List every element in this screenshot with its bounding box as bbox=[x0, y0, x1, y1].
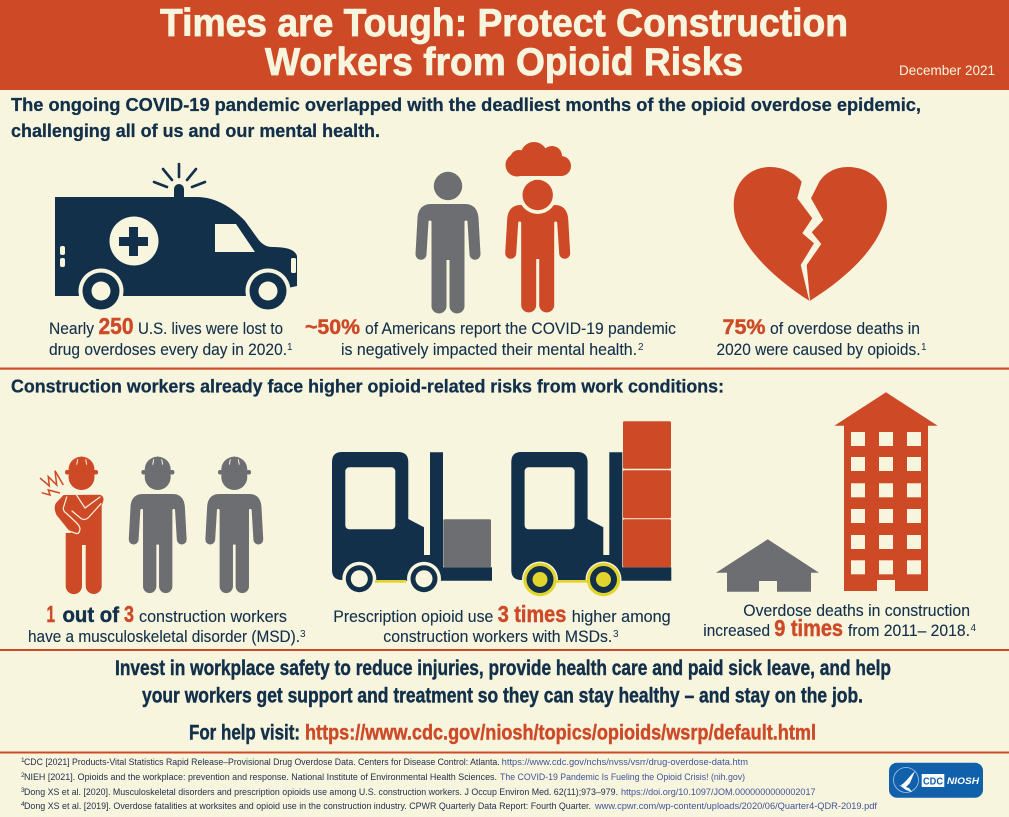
caption: overdose lives: 1 bbox=[287, 342, 293, 353]
icon: broken heart bbox=[734, 167, 887, 301]
caption: opioid share: 1 bbox=[921, 342, 927, 353]
caption: opioid share: 2020 were caused by opioids. bbox=[716, 341, 920, 359]
references: 1 bbox=[21, 757, 25, 764]
references: 4 bbox=[21, 801, 25, 808]
caption: overdose lives: U.S. lives were lost to bbox=[138, 320, 283, 338]
caption: mental health: 2 bbox=[638, 342, 644, 353]
references: The COVID-19 Pandemic Is Fueling the Opioid Crisis! (nih.gov) bbox=[500, 772, 745, 782]
help link: For help visit: bbox=[189, 722, 300, 744]
caption: overdose increase: from 2011– 2018. bbox=[848, 622, 970, 640]
references bbox=[21, 757, 877, 811]
caption: mental health: is negatively impacted their mental health. bbox=[341, 341, 637, 359]
caption: prescription opioid use bbox=[333, 601, 671, 646]
logo: CDC NIOSH: NIOSH bbox=[947, 776, 980, 786]
caption: overdose lives bbox=[49, 313, 293, 359]
references: NIEH [2021]. Opioids and the workplace: prevention and response. National Institute of Environmental Health Sciences. bbox=[24, 772, 497, 782]
caption: overdose lives: 250 bbox=[98, 313, 134, 339]
caption: overdose increase: 4 bbox=[970, 623, 976, 634]
references: Dong XS et al. [2020]. Musculoskeletal disorders and prescription opioids use among U.S. construction workers. J Occup Environ Med. 62(11);973–979. bbox=[24, 787, 618, 797]
references: https://www.cdc.gov/nchs/nvss/vsrr/drug-overdose-data.htm bbox=[502, 757, 748, 767]
title: Times are Tough: Protect Construction bbox=[160, 2, 848, 45]
icon: tall red building bbox=[834, 392, 938, 591]
caption: prescription opioid use: higher among bbox=[572, 608, 671, 626]
caption: opioid share: 75% bbox=[722, 316, 766, 339]
caption: overdose lives: drug overdoses every day in 2020. bbox=[49, 341, 287, 359]
caption: MSD prevalence: out of bbox=[62, 604, 120, 627]
intro heading bbox=[11, 94, 921, 141]
caption: prescription opioid use: 3 times bbox=[498, 601, 566, 627]
icon: injured red worker bbox=[40, 456, 104, 594]
caption: overdose increase: 9 times bbox=[774, 615, 843, 641]
caption: opioid share: of overdose deaths in bbox=[770, 320, 920, 338]
caption: prescription opioid use: Prescription opioid use bbox=[333, 608, 493, 626]
caption: MSD prevalence: 1 bbox=[46, 601, 55, 627]
references: https://doi.org/10.1097/JOM.0000000000002017 bbox=[621, 787, 816, 797]
icon: ambulance bbox=[55, 164, 300, 314]
references: www.cpwr.com/wp-content/uploads/2020/06/Quarter4-QDR-2019.pdf bbox=[594, 801, 877, 811]
caption: mental health: ~50% bbox=[305, 316, 360, 339]
logo: CDC NIOSH bbox=[889, 763, 983, 798]
load boxes bbox=[623, 421, 671, 567]
intro heading: challenging all of us and our mental health. bbox=[11, 120, 380, 141]
call to action bbox=[115, 657, 891, 708]
icon: cloud bbox=[506, 142, 571, 176]
icon: forklift with tall load bbox=[511, 421, 671, 598]
icon: red person with cloud bbox=[505, 142, 571, 312]
references: CDC [2021] Products-Vital Statistics Rapid Release–Provisional Drug Overdose Data. Centers for Disease Control: Atlanta. bbox=[24, 757, 500, 767]
caption: overdose increase bbox=[703, 602, 976, 641]
date: December 2021 bbox=[899, 63, 995, 78]
references: Dong XS et al. [2019]. Overdose fatalities at worksites and opioid use in the construction industry. CPWR Quarterly Data Report: Fourth Quarter. bbox=[24, 801, 591, 811]
call to action: your workers get support and treatment so they can stay healthy – and stay on the job. bbox=[142, 684, 863, 708]
logo: CDC NIOSH: CDC bbox=[923, 776, 943, 788]
title bbox=[160, 2, 848, 84]
caption: mental health bbox=[305, 316, 676, 359]
icon: gray worker one bbox=[129, 456, 187, 593]
caption: prescription opioid use: construction workers with MSDs. bbox=[383, 628, 612, 646]
header banner bbox=[0, 0, 1009, 90]
caption: MSD prevalence: 3 bbox=[300, 629, 306, 640]
references: 2 bbox=[21, 772, 25, 779]
caption: MSD prevalence: 3 bbox=[124, 601, 134, 627]
windows bbox=[851, 432, 921, 574]
icon: gray person bbox=[415, 172, 481, 314]
caption: MSD prevalence bbox=[28, 601, 306, 646]
caption: MSD prevalence: have a musculoskeletal disorder (MSD). bbox=[28, 628, 300, 646]
help link: https://www.cdc.gov/niosh/topics/opioids/wsrp/default.html bbox=[305, 722, 816, 744]
title: Workers from Opioid Risks bbox=[265, 41, 743, 84]
caption: mental health: of Americans report the COVID-19 pandemic bbox=[365, 320, 676, 338]
section heading: Construction workers already face higher opioid-related risks from work conditions: bbox=[11, 376, 724, 396]
icon: gray worker two bbox=[205, 456, 263, 593]
caption: overdose lives: Nearly bbox=[49, 320, 95, 338]
icon: forklift with small load bbox=[332, 452, 492, 596]
icon: small gray house bbox=[716, 539, 819, 592]
references: 3 bbox=[21, 787, 25, 794]
caption: opioid share bbox=[716, 316, 927, 359]
caption: MSD prevalence: construction workers bbox=[139, 608, 287, 626]
caption: prescription opioid use: 3 bbox=[613, 629, 619, 640]
intro heading: The ongoing COVID-19 pandemic overlapped with the deadliest months of the opioid overdose epidemic, bbox=[11, 94, 921, 115]
caption: overdose increase: Overdose deaths in construction bbox=[743, 602, 970, 620]
caption: overdose increase: increased bbox=[703, 622, 770, 640]
